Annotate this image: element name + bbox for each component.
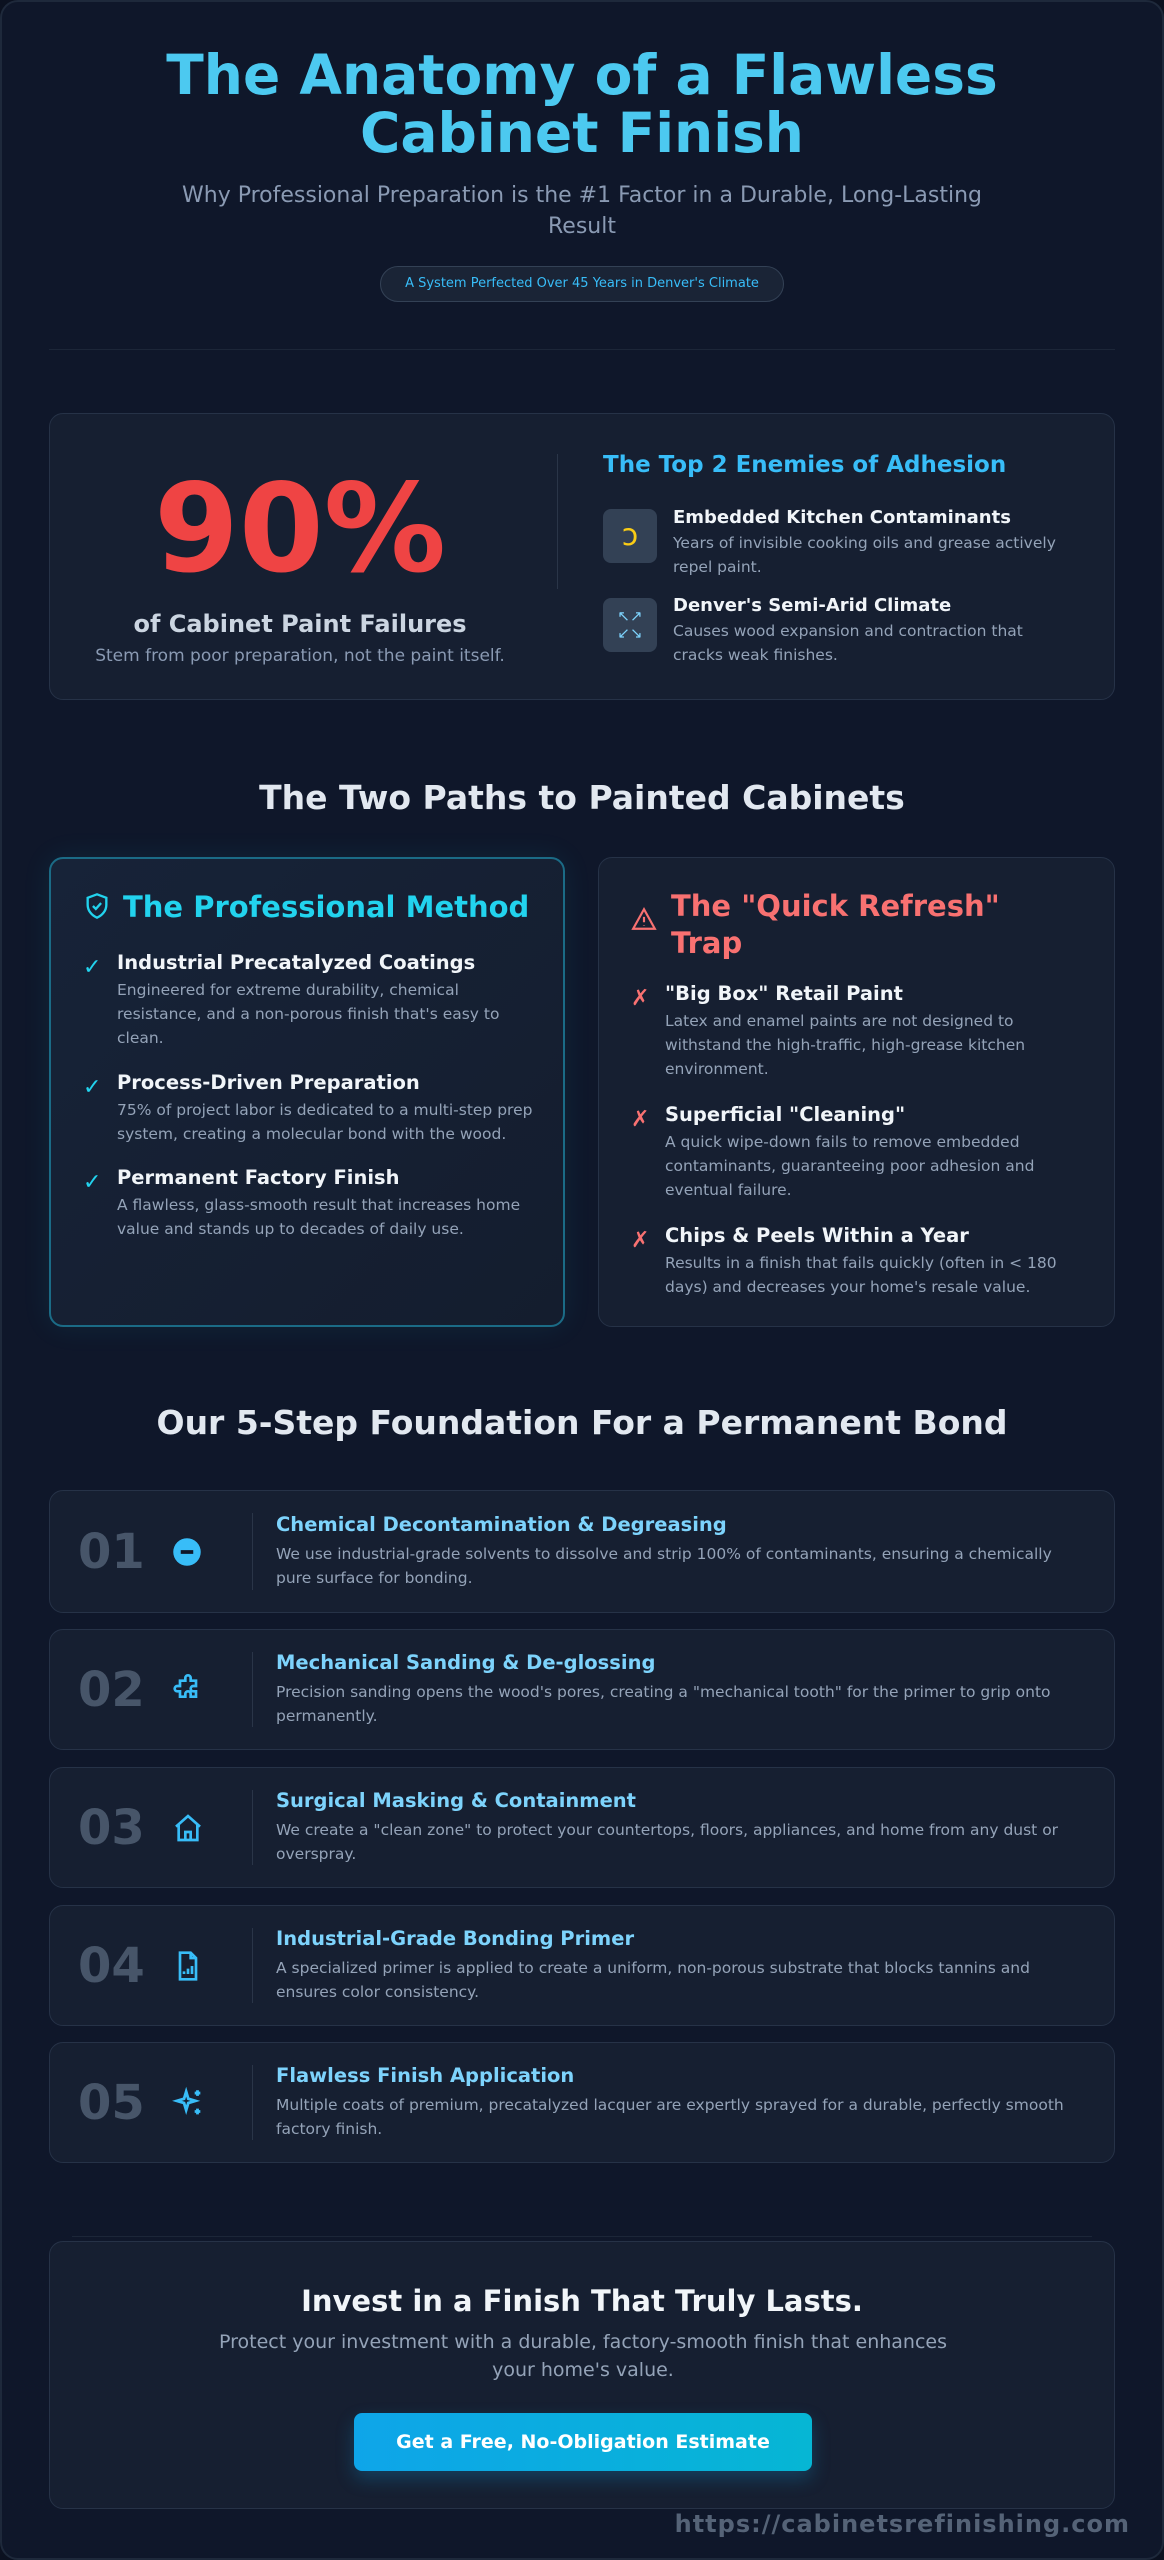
panel: quick refresh: The "Quick Refresh" (671, 889, 1000, 923)
step 3: Surgical Masking & Containment (276, 1789, 636, 1812)
badge: A System Perfected Over 45 Years in Denver's Climate (405, 276, 759, 291)
panel: quick refresh: ✗ (631, 986, 649, 1011)
big stat: 90% (154, 458, 446, 600)
step 2: Precision sanding opens the wood's pores, creating a "mechanical tooth" for the primer to grip onto permanently. (276, 1683, 1051, 1725)
panel: professional: 75% of project labor is dedicated to a multi-step prep system, creating a molecular bond with the wood. (117, 1101, 532, 1143)
step 3 (49, 1767, 1115, 1888)
panel: stat: Embedded Kitchen Contaminants (673, 507, 1011, 528)
panel: quick refresh: A quick wipe-down fails to remove embedded contaminants, guaranteeing poor adhesion and eventual failure. (665, 1133, 1034, 1199)
step 3: 03 (78, 1800, 145, 1856)
icon: expand (603, 598, 657, 652)
step 4 (49, 1905, 1115, 2026)
panel: quick refresh: ✗ (631, 1228, 649, 1253)
panel: CTA (49, 2241, 1115, 2509)
step 5: Flawless Finish Application (276, 2064, 574, 2087)
enemies list: The Top 2 Enemies of Adhesion (603, 452, 1006, 478)
panel: professional: Process-Driven Preparation (117, 1071, 420, 1094)
step 1: Chemical Decontamination & Degreasing (276, 1513, 727, 1536)
step 2 (49, 1629, 1115, 1750)
panel: professional: Industrial Precatalyzed Coatings (117, 951, 475, 974)
step 5: Multiple coats of premium, precatalyzed lacquer are expertly sprayed for a durable, perfectly smooth factory finish. (276, 2096, 1064, 2138)
panel: stat: Causes wood expansion and contraction that cracks weak finishes. (673, 622, 1023, 664)
step 1: We use industrial-grade solvents to dissolve and strip 100% of contaminants, ensuring a chemically pure surface for bonding. (276, 1545, 1052, 1587)
panel: CTA: Protect your investment with a durable, factory-smooth finish that enhances your home's value. (219, 2331, 947, 2381)
panel: professional: Permanent Factory Finish (117, 1166, 400, 1189)
icon: expand: ↖↗ (617, 607, 643, 625)
panel: quick refresh: Results in a finish that fails quickly (often in < 180 days) and decreases your home's resale value. (665, 1254, 1057, 1296)
panel: quick refresh: Superficial "Cleaning" (665, 1103, 905, 1126)
panel: quick refresh: ✗ (631, 1107, 649, 1132)
big stat (95, 458, 505, 666)
heading: 5 steps: Our 5-Step Foundation For a Permanent Bond (157, 1403, 1007, 1442)
panel: professional (49, 857, 565, 1327)
panel: professional: Engineered for extreme durability, chemical resistance, and a non-porous finish that's easy to clean. (117, 981, 499, 1047)
step 2: Mechanical Sanding & De-glossing (276, 1651, 655, 1674)
title: Cabinet Finish (360, 101, 804, 165)
step 3: We create a "clean zone" to protect your countertops, floors, appliances, and home from any dust or overspray. (276, 1821, 1058, 1863)
step 5: 05 (78, 2074, 145, 2130)
button (354, 2413, 812, 2471)
icon: expand: ↙↘ (617, 624, 643, 642)
panel: professional: A flawless, glass-smooth result that increases home value and stands up to decades of daily use. (117, 1196, 520, 1238)
step 2: 02 (78, 1662, 145, 1718)
big stat: Stem from poor preparation, not the paint itself. (95, 646, 505, 666)
step 4: 04 (78, 1938, 145, 1994)
panel: stat: Years of invisible cooking oils and grease actively repel paint. (673, 534, 1056, 576)
panel: quick refresh: "Big Box" Retail Paint (665, 982, 903, 1005)
panel: professional: The Professional Method (123, 890, 529, 924)
panel: professional: ✓ (83, 955, 101, 980)
panel: stat: Denver's Semi-Arid Climate (673, 595, 951, 616)
icon: grease: ↄ (622, 518, 638, 553)
panel: quick refresh: Latex and enamel paints are not designed to withstand the high-traffic, high-grease kitchen environment. (665, 1012, 1025, 1078)
big stat: of Cabinet Paint Failures (133, 610, 467, 638)
panel: quick refresh (598, 857, 1115, 1327)
panel: quick refresh: Trap (671, 926, 742, 960)
badge (380, 266, 784, 302)
panel: quick refresh: Chips & Peels Within a Year (665, 1224, 969, 1247)
url: https://cabinetsrefinishing.com (675, 2510, 1130, 2538)
panel: professional: ✓ (83, 1075, 101, 1100)
title (166, 43, 998, 165)
step 4: A specialized primer is applied to create a uniform, non-porous substrate that blocks tannins and ensures color consistency. (276, 1959, 1030, 2001)
step 1 (49, 1490, 1115, 1613)
panel: stat (49, 413, 1115, 700)
panel: professional: ✓ (83, 1170, 101, 1195)
enemies list (603, 452, 1056, 664)
heading: two paths: The Two Paths to Painted Cabinets (259, 778, 905, 817)
button: Get a Free, No-Obligation Estimate (396, 2431, 770, 2453)
subtitle: Why Professional Preparation is the #1 Factor in a Durable, Long-Lasting Result (182, 183, 982, 239)
step 1: 01 (78, 1524, 145, 1580)
title: The Anatomy of a Flawless (166, 43, 998, 107)
step 5 (49, 2042, 1115, 2163)
icon: grease (603, 509, 657, 563)
step 4: Industrial-Grade Bonding Primer (276, 1927, 634, 1950)
panel: CTA: Invest in a Finish That Truly Lasts. (301, 2284, 863, 2318)
